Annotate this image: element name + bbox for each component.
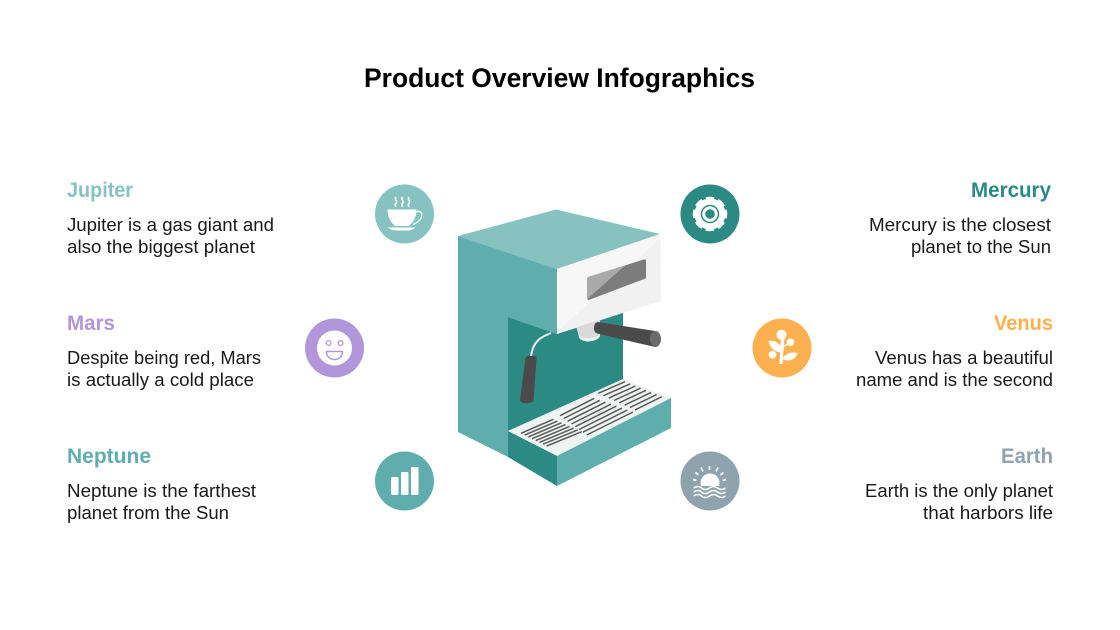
panel: Mercury text: Mercury: [971, 179, 1051, 202]
icon: bar chart: [375, 452, 434, 510]
panel: Earth text: Earth: [1001, 445, 1053, 468]
icon: sunset over water: [680, 452, 740, 510]
icon: smiley face: [305, 318, 364, 378]
panel: Venus text: name and is the second: [856, 370, 1053, 390]
machine recess: [508, 309, 623, 431]
panel: Venus text: Venus has a beautiful: [875, 348, 1053, 368]
tray grate slots: [521, 382, 662, 446]
title: Product Overview Infographics: [364, 63, 755, 93]
machine left side: [458, 236, 557, 457]
panel: Neptune text: Neptune: [67, 445, 151, 468]
panel: Jupiter text: [67, 179, 274, 257]
panel: Jupiter text: Jupiter is a gas giant and: [67, 215, 274, 235]
icon: gear: [680, 184, 740, 244]
panel: Jupiter text: Jupiter: [67, 179, 133, 202]
panel: Earth text: that harbors life: [923, 503, 1053, 523]
panel: Mars text: Mars: [67, 312, 115, 335]
drip tray: [508, 379, 671, 486]
panel: Neptune text: [67, 445, 256, 523]
display window: [587, 259, 646, 300]
panel: Mercury text: Mercury is the closest: [869, 215, 1051, 235]
panel: Mercury text: planet to the Sun: [911, 237, 1051, 257]
icon: plant: [752, 318, 812, 378]
machine top face: [458, 210, 660, 269]
panel: Neptune text: planet from the Sun: [67, 503, 229, 523]
panel: Venus text: [856, 312, 1053, 390]
steam wand: [520, 333, 551, 403]
icon: coffee cup: [375, 184, 434, 244]
portafilter handle: [594, 322, 661, 347]
panel: Jupiter text: also the biggest planet: [67, 237, 255, 257]
coffee machine illustration: [458, 210, 671, 486]
panel: Mars text: Despite being red, Mars: [67, 348, 261, 368]
panel: Venus text: Venus: [994, 312, 1053, 335]
panel: Mars text: [67, 312, 261, 390]
panel: Mercury text: [869, 179, 1051, 257]
machine white head: [557, 234, 661, 334]
group head: [576, 320, 600, 342]
panel: Neptune text: Neptune is the farthest: [67, 481, 256, 501]
panel: Mars text: is actually a cold place: [67, 370, 254, 390]
panel: Earth text: Earth is the only planet: [865, 481, 1053, 501]
panel: Earth text: [865, 445, 1053, 523]
